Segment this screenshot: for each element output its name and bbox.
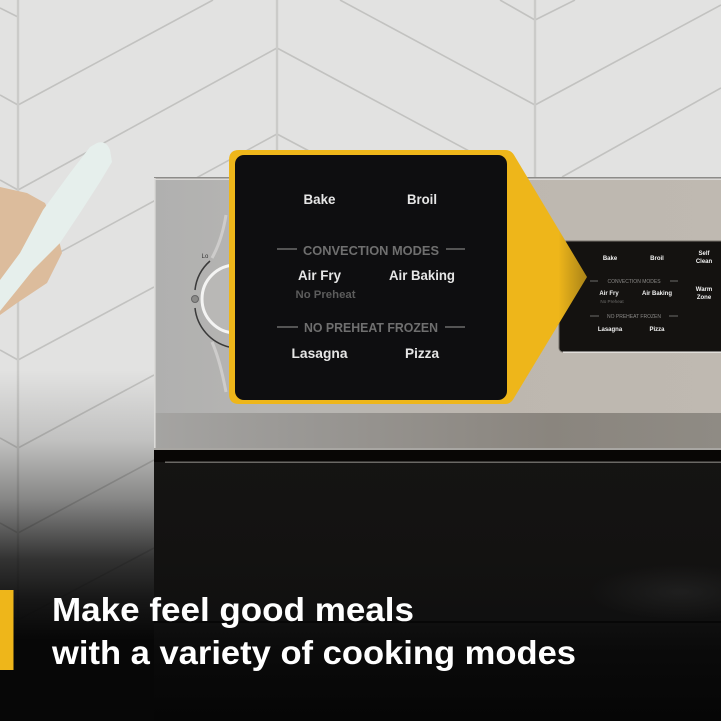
- wooden bowl: [0, 187, 62, 315]
- control knob: [192, 254, 270, 347]
- display: Air Fry: Air Fry: [599, 291, 619, 297]
- control knob: Lo: [202, 254, 209, 260]
- mode: Air Baking: Air Baking: [389, 267, 455, 283]
- yellow callout with arrow: [229, 150, 587, 404]
- display: no preheat: No Preheat: [600, 299, 624, 304]
- black oven door: [154, 450, 721, 721]
- mode: Lasagna: Lasagna: [292, 345, 348, 361]
- control display panel: [559, 241, 721, 353]
- mode: Bake: Bake: [304, 191, 336, 207]
- title: Make feel good meals: [52, 591, 414, 628]
- display: Warm Zone: Warm: [696, 287, 712, 293]
- display: Warm Zone: Zone: [697, 295, 712, 301]
- mode: Broil: Broil: [407, 191, 437, 207]
- display: Pizza: Pizza: [649, 327, 665, 333]
- display: Air Baking: Air Baking: [642, 291, 672, 297]
- note: no preheat: No Preheat: [296, 289, 356, 301]
- yellow accent bar: [0, 590, 14, 670]
- bottom fade over tiles: [0, 370, 154, 721]
- white spatula: [0, 142, 112, 311]
- display: Self Clean: Self: [698, 251, 710, 257]
- display: Bake: Bake: [603, 256, 618, 262]
- display: Self Clean: Clean: [696, 259, 713, 265]
- range control panel body: [154, 177, 721, 450]
- display: no preheat frozen: NO PREHEAT FROZEN: [607, 314, 661, 320]
- heading: no preheat frozen: NO PREHEAT FROZEN: [304, 320, 438, 335]
- mode: Air Fry: Air Fry: [298, 267, 341, 283]
- mode: Pizza: Pizza: [405, 345, 439, 361]
- display: convection modes: CONVECTION MODES: [607, 279, 661, 285]
- callout black panel: [235, 155, 507, 400]
- title: with a variety of cooking modes: [51, 634, 576, 671]
- display: Lasagna: Lasagna: [598, 327, 623, 333]
- heading: convection modes: CONVECTION MODES: [303, 243, 439, 258]
- title: [51, 591, 576, 671]
- display: Broil: Broil: [650, 256, 664, 262]
